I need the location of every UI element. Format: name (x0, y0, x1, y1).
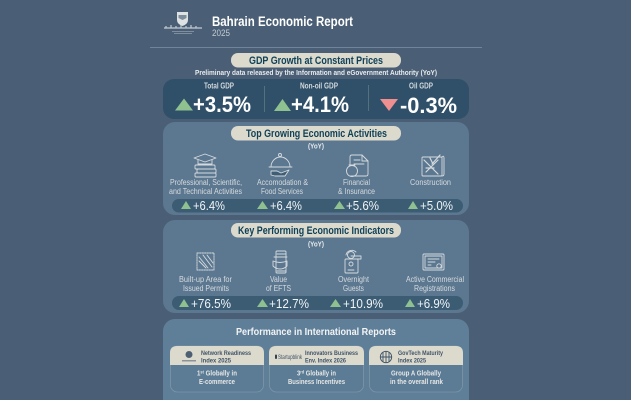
panel: top growing activities (163, 122, 469, 215)
card: network readiness: E-commerce (199, 379, 235, 386)
panel: international reports (163, 319, 469, 400)
card: innovators business (269, 346, 364, 392)
indicator growth bar: +10.9% (343, 296, 383, 311)
card: network readiness: Network Readiness (201, 350, 251, 357)
YoY note: (YoY) (308, 242, 324, 248)
activity growth bar (172, 198, 463, 213)
card: network readiness: Index 2025 (201, 358, 231, 364)
oil GDP: Oil GDP (409, 82, 434, 90)
card: govtech maturity: Group A Globally (391, 370, 441, 378)
card: innovators business: Env. Index 2026 (305, 358, 346, 364)
card: innovators business: Innovators Business (305, 350, 358, 357)
icon: finance document (346, 155, 368, 176)
card: govtech maturity: Index 2025 (398, 358, 426, 364)
card: network readiness (170, 346, 264, 392)
subtitle: Preliminary data released by the Information and eGovernment Authority (YoY) (195, 68, 437, 77)
non-oil GDP (274, 82, 349, 117)
indicator labels: Guests (343, 284, 364, 293)
activity growth bar: +5.6% (346, 198, 379, 213)
report year: 2025 (212, 28, 230, 38)
heading: top growing activities (231, 126, 401, 140)
activity growth bar: +6.4% (193, 198, 225, 213)
card: innovators business: 3 (297, 370, 301, 378)
indicator labels: of EFTS (266, 284, 291, 293)
activity labels: Food Services (261, 187, 303, 196)
indicator growth bar: +12.7% (269, 296, 309, 311)
card: innovators business: Startupblink (278, 355, 303, 361)
non-oil GDP: +4.1% (291, 92, 349, 117)
oil GDP: -0.3% (400, 93, 457, 118)
GDP figures strip (163, 79, 469, 119)
activity growth bar: +6.4% (270, 198, 302, 213)
panel: key indicators (163, 220, 469, 313)
icon: serving dish (269, 154, 292, 176)
total GDP: Total GDP (204, 82, 235, 90)
icon: books and graduation cap (194, 154, 216, 177)
heading: key indicators (231, 223, 401, 238)
activity labels: Accomodation & (257, 178, 309, 187)
total GDP (175, 82, 251, 117)
activity growth bar: +5.0% (420, 198, 453, 213)
indicator labels: Value (270, 275, 287, 284)
activity labels (169, 178, 451, 196)
report title: Bahrain Economic Report (212, 14, 353, 29)
heading: GDP growth: GDP Growth at Constant Prices (249, 55, 383, 67)
card: innovators business: Globally in (304, 370, 336, 378)
indicator labels: Registrations (414, 284, 455, 293)
activity labels: & Insurance (338, 187, 375, 196)
header (164, 12, 353, 38)
non-oil GDP: Non-oil GDP (300, 82, 339, 90)
card: innovators business: Business Incentives (288, 379, 345, 386)
indicator growth bar: +6.9% (417, 296, 450, 311)
icon: EFTS phone (273, 251, 287, 273)
indicator labels: Active Commercial (406, 275, 464, 284)
indicator labels (179, 275, 464, 293)
card: network readiness: st (200, 370, 204, 374)
heading: key indicators: Key Performing Economic Indicators (238, 225, 394, 237)
card: govtech maturity: GovTech Maturity (398, 350, 443, 357)
activity labels: Professional, Scientific, (170, 178, 242, 187)
indicator growth bar (172, 296, 463, 311)
card: govtech maturity (369, 346, 463, 392)
YoY note: (YoY) (308, 144, 324, 150)
heading: international reports: Performance in International Reports (236, 326, 396, 338)
activity labels: and Technical Activities (169, 187, 242, 196)
activity labels: Financial (343, 178, 370, 187)
indicator labels: Issued Permits (183, 284, 229, 293)
panel: GDP growth (163, 53, 469, 119)
activity labels: Construction (410, 178, 451, 187)
card: innovators business: rd (300, 370, 304, 374)
card: network readiness: Globally in (204, 370, 237, 378)
card: govtech maturity: in the overall rank (390, 379, 443, 386)
oil GDP (380, 82, 457, 118)
indicator labels: Built-up Area for (179, 275, 232, 284)
heading: top growing activities: Top Growing Economic Activities (246, 128, 387, 140)
icon: built-up area (197, 253, 214, 270)
icon: construction blueprint (422, 155, 444, 176)
icon: door hanger (345, 250, 361, 273)
logo (164, 12, 202, 34)
heading: GDP growth (231, 53, 401, 68)
icon: commercial certificate (423, 254, 444, 270)
total GDP: +3.5% (193, 92, 251, 117)
indicator growth bar: +76.5% (191, 296, 231, 311)
card: network readiness: 1 (197, 370, 201, 378)
indicator labels: Overnight (338, 275, 370, 284)
